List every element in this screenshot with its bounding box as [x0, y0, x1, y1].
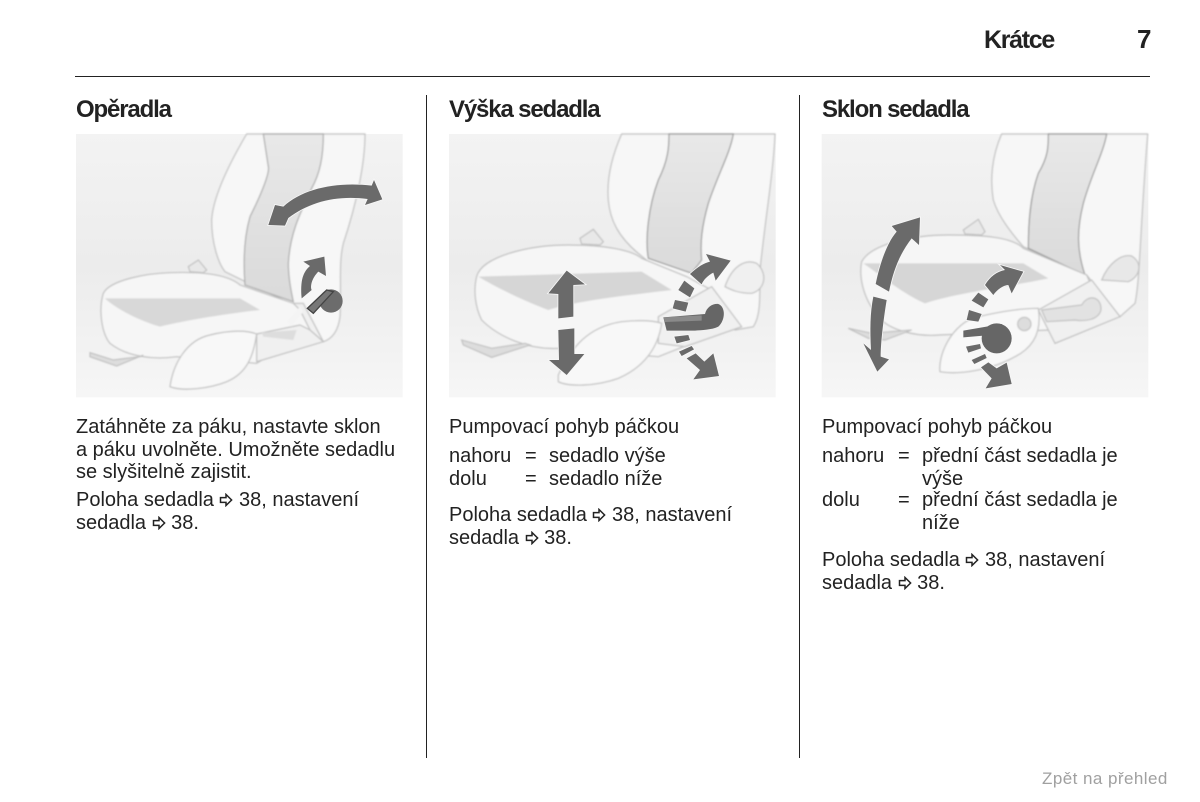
body text: dolu [822, 489, 860, 511]
arrow: pump lever dashed [673, 254, 731, 379]
body text: přední část sedadla je [922, 445, 1118, 467]
column divider [799, 95, 800, 758]
body text: sedadlo výše [549, 445, 666, 467]
illustration: backrest lever [76, 132, 402, 397]
body text: se slyšitelně zajistit. [76, 461, 252, 483]
body text: = [898, 445, 910, 467]
header rule [75, 76, 1150, 77]
column divider [426, 95, 427, 758]
body text: Poloha sedadla 38, nastavení [76, 489, 359, 511]
body text: přední část sedadla je [922, 489, 1118, 511]
body text: níže [922, 512, 960, 534]
body text: a páku uvolněte. Umožněte sedadlu [76, 439, 395, 461]
body text: výše [922, 468, 963, 490]
body text: Poloha sedadla 38, nastavení [449, 504, 732, 526]
heading: Opěradla [76, 96, 171, 123]
arrow: front edge up and down [863, 217, 920, 372]
panel: Opěradla [76, 96, 402, 534]
body text: = [898, 489, 910, 511]
body text: sedadla 38. [76, 512, 199, 534]
body text [822, 416, 1118, 594]
body text: nahoru [449, 445, 511, 467]
body text: = [525, 445, 537, 467]
body text: dolu [449, 468, 487, 490]
illustration: seat tilt [822, 132, 1149, 397]
section name: Krátce [984, 26, 1054, 54]
body text: sedadla 38. [822, 572, 945, 594]
body text: Pumpovací pohyb páčkou [822, 416, 1052, 438]
body text: sedadla 38. [449, 527, 572, 549]
body text: Poloha sedadla 38, nastavení [822, 549, 1105, 571]
panel: Sklon sedadla [822, 96, 1149, 594]
footer link: Zpět na přehled [1042, 769, 1168, 788]
arrow: pump lever dashed [966, 265, 1023, 388]
arrow: pull lever [301, 257, 326, 298]
heading: Sklon sedadla [822, 96, 968, 123]
arrow: recline both ways [268, 180, 382, 226]
page header [75, 24, 1151, 77]
heading: Výška sedadla [449, 96, 600, 123]
body text [76, 416, 395, 534]
body text: Pumpovací pohyb páčkou [449, 416, 679, 438]
body text: nahoru [822, 445, 884, 467]
arrow: seat up and down [548, 271, 585, 375]
illustration: seat height [449, 132, 776, 397]
body text: sedadlo níže [549, 468, 662, 490]
body text: Zatáhněte za páku, nastavte sklon [76, 416, 381, 438]
panel: Výška sedadla [449, 96, 776, 549]
body text [449, 416, 732, 549]
body text: = [525, 468, 537, 490]
page number: 7 [1137, 24, 1151, 54]
